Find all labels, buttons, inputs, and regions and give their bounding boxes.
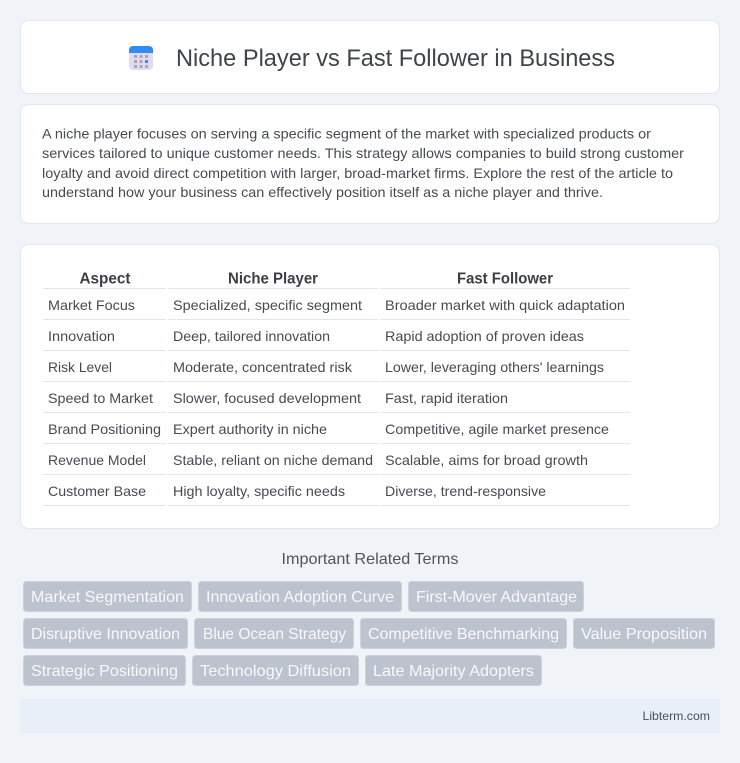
paragraph text: loyalty and avoid direct competition with larger, broad-market firms. Explore the rest of the article to (42, 165, 673, 181)
panel: comparison table (20, 244, 720, 528)
tag: Innovation Adoption Curve: Innovation Adoption Curve (206, 589, 394, 606)
row: Revenue Model: Revenue Model (48, 452, 146, 468)
tag: Market Segmentation (24, 582, 192, 612)
row: Innovation: Rapid adoption of proven ideas (385, 328, 584, 344)
related term tags (24, 582, 714, 686)
tag: Disruptive Innovation (24, 618, 188, 648)
row: Innovation: Deep, tailored innovation (173, 328, 330, 344)
row: Speed to Market: Fast, rapid iteration (385, 390, 508, 406)
row: Revenue Model (43, 452, 630, 475)
panel: intro paragraph (20, 104, 720, 224)
row: Risk Level: Lower, leveraging others' learnings (385, 359, 604, 375)
tag: Market Segmentation: Market Segmentation (31, 589, 184, 606)
row: Customer Base: Diverse, trend-responsive (385, 483, 546, 499)
row: Revenue Model: Scalable, aims for broad growth (385, 452, 588, 468)
tag: Blue Ocean Strategy (194, 618, 354, 648)
paragraph text: understand how your business can effectively position itself as a niche player and thrive. (42, 184, 603, 200)
table header row: Niche Player (228, 270, 318, 288)
tag: Competitive Benchmarking (360, 618, 566, 648)
row: Brand Positioning (43, 421, 630, 444)
tag: Technology Diffusion: Technology Diffusion (200, 663, 351, 680)
table header row (43, 270, 630, 289)
paragraph text: A niche player focuses on serving a specific segment of the market with specialized products or (42, 126, 651, 142)
paragraph text (42, 126, 684, 200)
row: Customer Base: High loyalty, specific needs (173, 483, 345, 499)
row: Market Focus: Market Focus (48, 297, 135, 313)
row: Brand Positioning: Competitive, agile market presence (385, 421, 609, 437)
row: Speed to Market (43, 390, 630, 413)
paragraph text: services tailored to unique customer needs. This strategy allows companies to build strong customer (42, 145, 684, 161)
row: Market Focus (43, 297, 630, 320)
tag: Late Majority Adopters (366, 656, 542, 686)
tag: Value Proposition: Value Proposition (581, 626, 707, 643)
tag: Value Proposition (574, 618, 714, 648)
row: Innovation (43, 328, 630, 351)
table header row: Fast Follower (457, 270, 553, 288)
row: Brand Positioning: Expert authority in niche (173, 421, 327, 437)
tag: Competitive Benchmarking: Competitive Benchmarking (368, 626, 559, 643)
footer credit: Libterm.com (642, 709, 710, 723)
row: Market Focus: Specialized, specific segment (173, 297, 362, 313)
table header row: Aspect (80, 270, 131, 288)
row: Risk Level (43, 359, 630, 382)
row: Revenue Model: Stable, reliant on niche demand (173, 452, 373, 468)
tag: Strategic Positioning: Strategic Positioning (31, 663, 178, 680)
footer bar (20, 699, 720, 733)
tag: Blue Ocean Strategy: Blue Ocean Strategy (203, 626, 346, 643)
tag: Strategic Positioning (24, 656, 186, 686)
row: Innovation: Innovation (48, 328, 115, 344)
row: Risk Level: Moderate, concentrated risk (173, 359, 353, 375)
row: Brand Positioning: Brand Positioning (48, 421, 161, 437)
row: Customer Base: Customer Base (48, 483, 146, 499)
tag: Disruptive Innovation: Disruptive Innovation (31, 626, 180, 643)
row: Speed to Market: Slower, focused development (173, 390, 361, 406)
tag: First-Mover Advantage: First-Mover Advantage (416, 589, 577, 606)
tag: Innovation Adoption Curve (198, 582, 402, 612)
row: Customer Base (43, 483, 630, 506)
row: Risk Level: Risk Level (48, 359, 112, 375)
header panel (20, 20, 720, 94)
title: Niche Player vs Fast Follower in Business (176, 45, 615, 72)
heading: related terms: Important Related Terms (282, 551, 458, 568)
tag: Technology Diffusion (192, 656, 358, 686)
row: Market Focus: Broader market with quick adaptation (385, 297, 625, 313)
tag: Late Majority Adopters: Late Majority Adopters (373, 663, 534, 680)
tag: First-Mover Advantage (408, 582, 584, 612)
icon: calendar grid (129, 46, 153, 70)
row: Speed to Market: Speed to Market (48, 390, 153, 406)
